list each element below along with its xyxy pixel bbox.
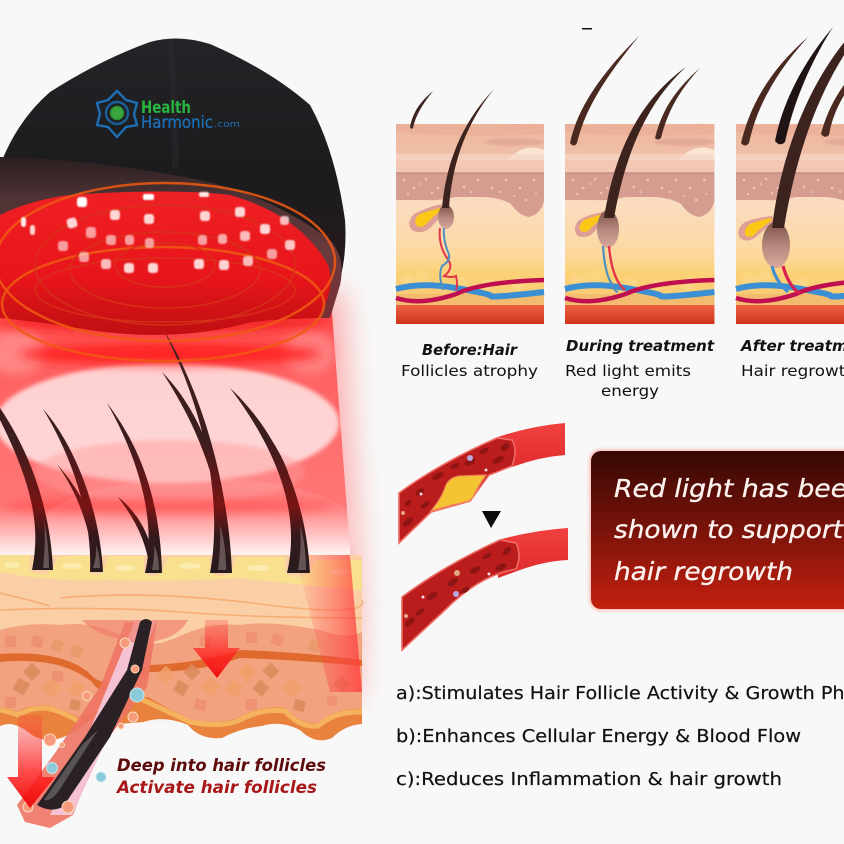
follicle pink sheath: [50, 620, 157, 815]
long hair: [442, 89, 494, 208]
sebaceous gland: [738, 216, 774, 241]
beam red band under cap: [20, 343, 320, 365]
narrowed vessel: [399, 423, 565, 543]
hair 1: [0, 408, 53, 570]
vessel interior: [399, 438, 515, 543]
outer ring: [0, 183, 335, 341]
clear vessel: [402, 528, 568, 650]
middle ring: [2, 247, 324, 361]
callout box: [591, 451, 844, 609]
hair 5: [230, 388, 310, 573]
benefits list: [396, 683, 844, 790]
beam overlay on skin: [295, 555, 362, 692]
hair left: [570, 36, 639, 146]
blood cells: [401, 441, 511, 528]
beam highlight ellipse upper: [0, 363, 339, 483]
benefit c: c):Reduces Inflammation & hair growth: [396, 769, 782, 790]
skin wavy lower border: [0, 555, 362, 740]
hair 4: [821, 82, 844, 137]
sebaceous gland: [409, 204, 444, 232]
caption 1 body: Follicles atrophy: [401, 362, 538, 380]
hair centre: [604, 67, 686, 218]
vessel wall outer: [495, 423, 565, 472]
beam body: [0, 300, 352, 575]
beam pale ring: [38, 478, 362, 582]
panel: LED light therapy cap: [0, 38, 346, 361]
line 2: Activate hair follicles: [115, 778, 317, 798]
hair shaft highlight: [44, 730, 98, 800]
hair 3: [107, 403, 162, 573]
callout glow: [590, 450, 844, 610]
hair root sheen: [43, 520, 306, 570]
hair 2: [775, 27, 833, 144]
hair 2: [43, 409, 103, 572]
blood supply blue: [440, 228, 449, 290]
epidermis yellow layer: [0, 555, 362, 590]
panel: scalp cross-section: [0, 555, 363, 740]
cap brim: [0, 157, 342, 318]
caption 2 body: Red light emits: [565, 362, 691, 380]
epidermis mottling: [4, 562, 350, 575]
platelets: [401, 455, 488, 515]
logo wordmark: Health: [141, 98, 191, 118]
fibre strands: [0, 593, 363, 618]
hair 1: [741, 37, 808, 146]
caption: follicle activation: [115, 756, 326, 798]
LED dots: [21, 192, 295, 273]
blood supply: [783, 266, 800, 294]
caption 2 heading: During treatment: [566, 337, 715, 355]
callout: red light statement: [590, 450, 844, 610]
line 1: Red light has been: [614, 474, 844, 503]
line 2: shown to support: [614, 515, 844, 544]
cap seam shading: [170, 40, 175, 168]
panel: blood vessels: [399, 423, 568, 650]
panel: scalp hairs: [0, 327, 310, 573]
skin cross-section: [396, 124, 544, 324]
blood supply blue: [772, 266, 788, 292]
panel: hair follicle: [17, 619, 188, 828]
hair 4: [162, 327, 232, 573]
cap red interior: [0, 192, 330, 335]
panel: after treatment skin: [736, 27, 844, 324]
platelets: [404, 570, 490, 618]
beam upper-right soft patch: [284, 330, 336, 374]
skin cell squares: [5, 632, 350, 712]
caption 1 heading: Before:Hair: [422, 341, 519, 359]
beam red band above hair roots: [5, 499, 335, 513]
skin dermis fill: [0, 555, 362, 723]
vessel wall outer: [498, 528, 568, 578]
stray dash: [582, 28, 592, 30]
blue bubbles: [46, 688, 144, 782]
skin cross-section: [565, 124, 714, 324]
upper skin pale orange layer: [0, 555, 362, 644]
line 1: Deep into hair follicles: [117, 756, 326, 776]
beam upper-left soft patch: [0, 330, 45, 374]
panel: during treatment skin: [565, 36, 714, 324]
inner rings: [35, 205, 295, 325]
vessel interior: [402, 540, 519, 650]
panel: red light beam: [0, 290, 362, 700]
benefit a: a):Stimulates Hair Follicle Activity & Growth Phase: [396, 683, 844, 704]
skin wave highlight: [0, 700, 362, 726]
beam outer glow: [0, 290, 362, 700]
line 3: hair regrowth: [614, 557, 793, 586]
follicle papilla cone: [82, 620, 188, 645]
arrow: red light into dermis: [193, 620, 240, 678]
sebaceous gland: [575, 212, 606, 237]
plaque: [431, 475, 486, 511]
benefit b: b):Enhances Cellular Energy & Blood Flow: [396, 726, 801, 747]
beam highlight ellipse lower: [35, 440, 305, 504]
cap crown: [0, 38, 346, 300]
follicle bulb: [438, 205, 454, 229]
blood cells: [403, 545, 513, 628]
logo: Health Harmonic: [97, 91, 240, 137]
skin cross-section: [736, 124, 844, 324]
hair shaft: [37, 619, 152, 810]
follicle bulb: [597, 210, 619, 248]
hair 3: [772, 40, 844, 228]
skin panel captions: [401, 337, 844, 400]
caption 2 body second line: energy: [601, 382, 659, 400]
blood supply blue: [603, 246, 618, 292]
callout text: [614, 474, 844, 586]
logo flower icon: [97, 91, 137, 137]
follicle bulb: [762, 222, 790, 268]
concentric glowing rings: [0, 183, 335, 361]
soft red glow under cap rim: [0, 312, 330, 332]
panel: before treatment skin: [396, 89, 544, 324]
small hair: [410, 91, 433, 129]
arrow: before to after: [482, 511, 501, 528]
follicle outer sheath: [17, 622, 157, 828]
arrow: red light into follicle: [7, 715, 55, 808]
hair right: [655, 68, 700, 140]
logo domain: .com: [214, 120, 240, 130]
nutrient bubbles: [23, 638, 144, 813]
orange bubbles: [23, 638, 139, 813]
logo wordmark second line: Harmonic: [141, 113, 213, 133]
caption 3 body: Hair regrowth: [741, 362, 844, 380]
blood supply: [609, 246, 625, 290]
dark orange band: [0, 650, 362, 691]
blood supply: [440, 228, 457, 290]
